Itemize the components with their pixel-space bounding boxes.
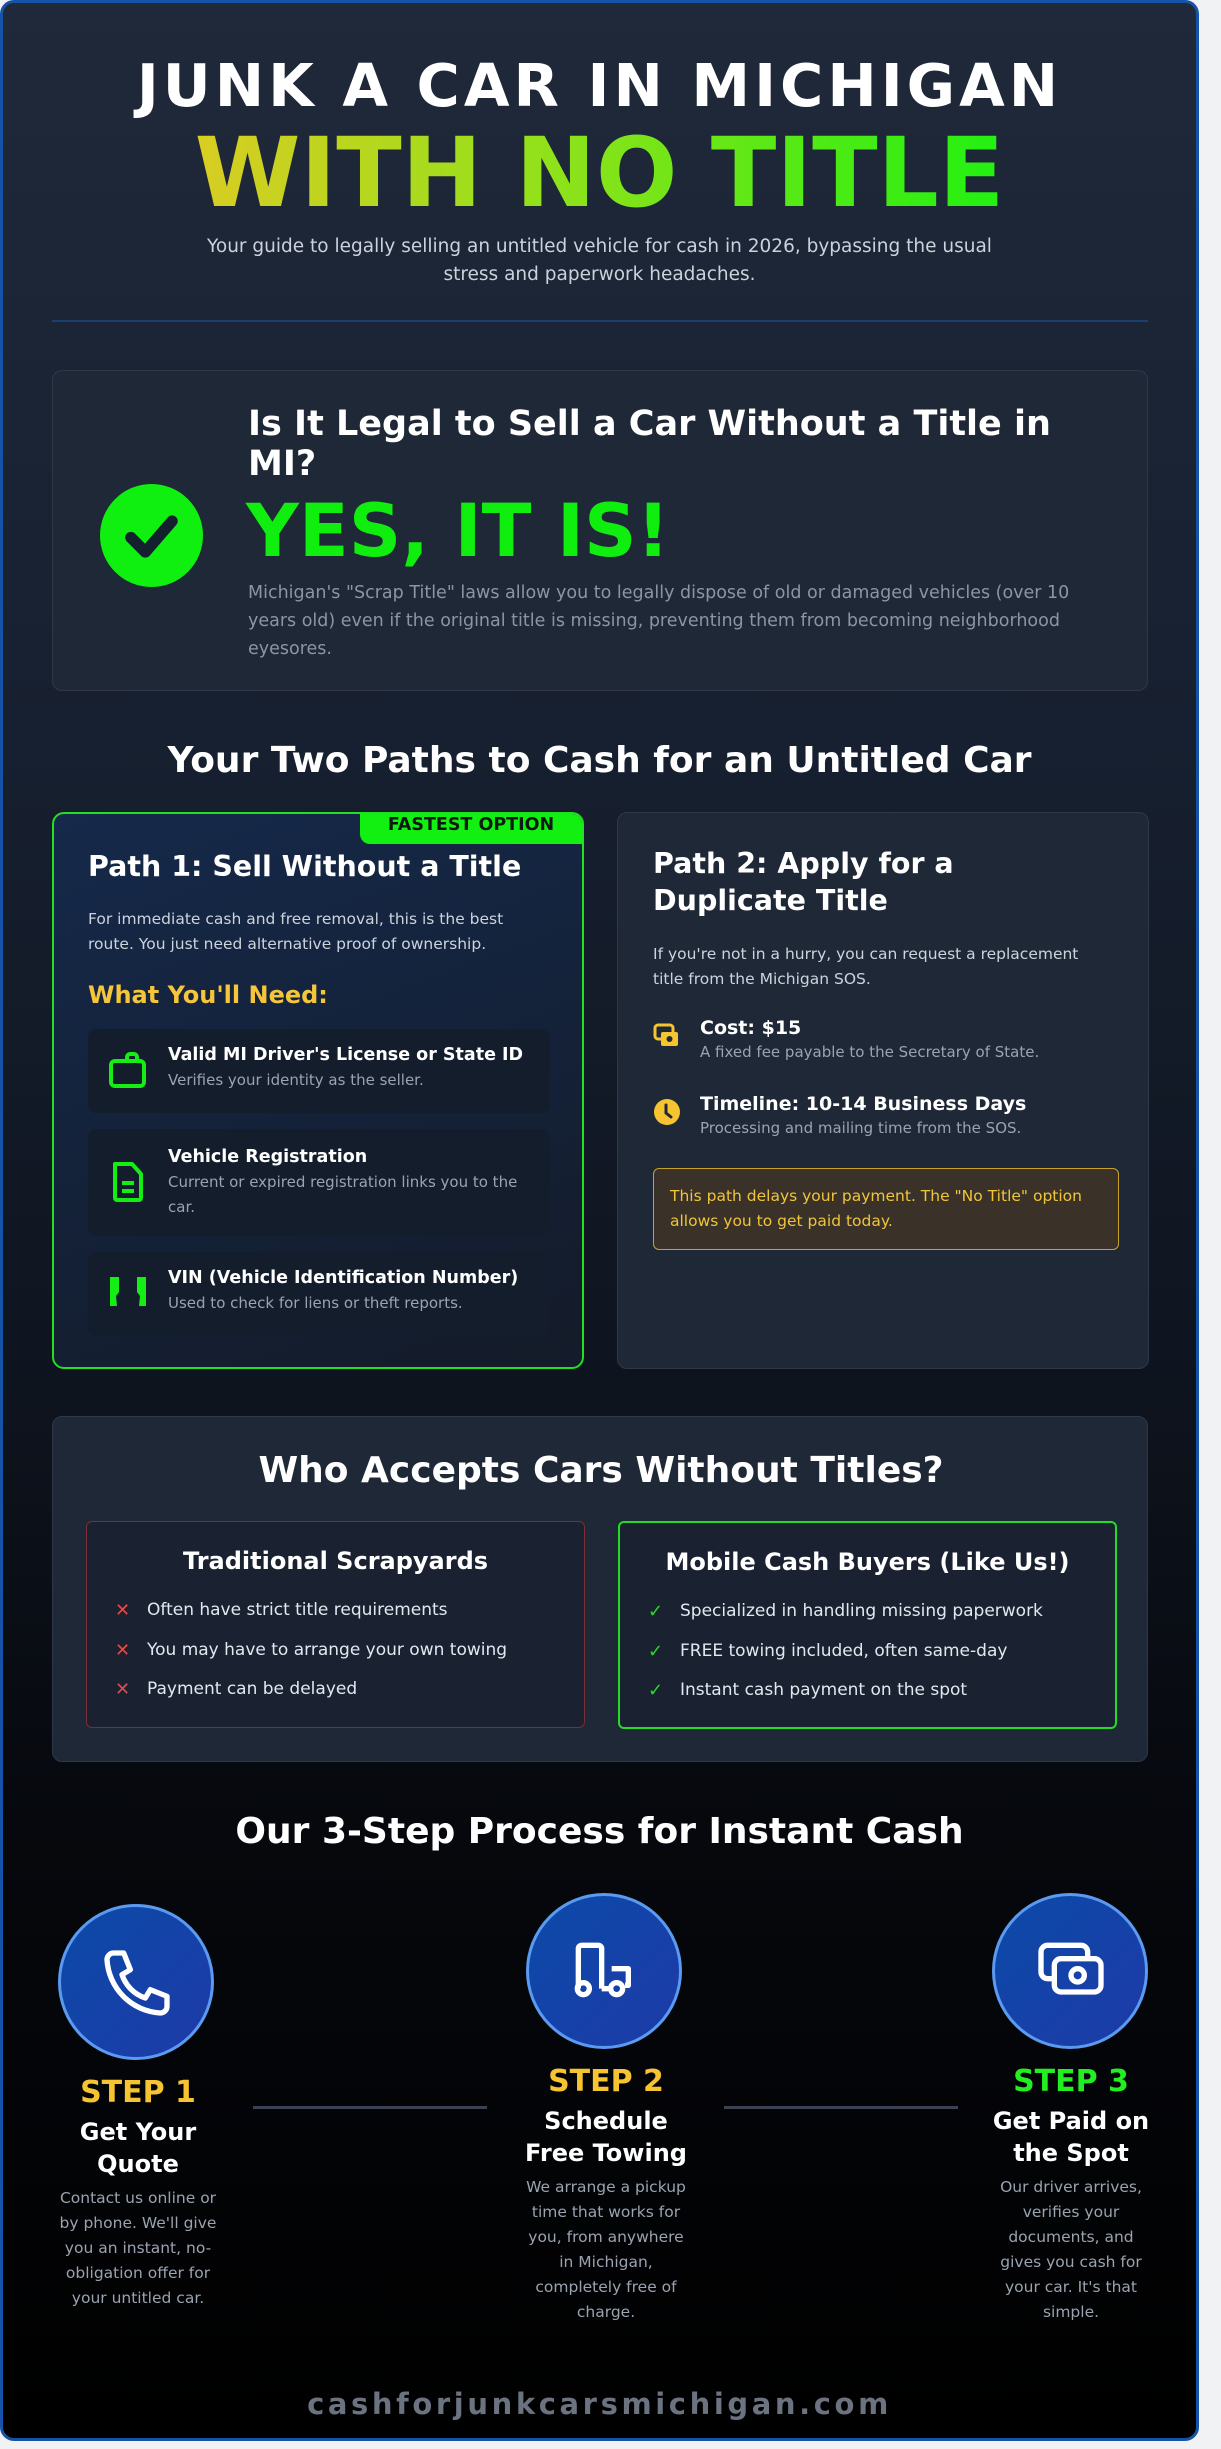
box: mobile cash buyers: Mobile Cash Buyers (Like Us!) — [665, 1548, 1070, 1576]
badge: fastest option — [360, 814, 582, 844]
path 1 description: For immediate cash and free removal, this is the best route. You just need alternative proof of ownership. — [88, 910, 503, 953]
panel: who accepts — [52, 1416, 1148, 1762]
box: traditional scrapyards: Payment can be delayed — [147, 1679, 357, 1699]
subheading: what you'll need: What You'll Need: — [88, 981, 328, 1009]
icon: cash — [992, 1893, 1148, 2049]
step 1: STEP 1 — [80, 2075, 196, 2110]
heading: 3-step process: Our 3-Step Process for Instant Cash — [235, 1811, 964, 1852]
box: traditional scrapyards: ✕ — [115, 1600, 130, 1621]
cost item — [700, 1017, 1039, 1061]
icon: cost — [654, 1024, 678, 1046]
callout: delay warning — [653, 1168, 1119, 1250]
step 3 — [993, 2064, 1149, 2321]
item: vehicle registration: Vehicle Registration — [168, 1147, 367, 1167]
step 3: Our driver arrives, verifies your documents, and gives you cash for your car. It's that simple. — [1000, 2178, 1142, 2321]
box: mobile cash buyers: ✓ — [648, 1601, 663, 1622]
step 1: Get Your Quote — [80, 2118, 196, 2178]
box: mobile cash buyers: ✓ — [648, 1641, 663, 1662]
path 2 description: If you're not in a hurry, you can request a replacement title from the Michigan SOS. — [653, 945, 1078, 988]
answer: yes it is: YES, IT IS! — [246, 489, 670, 574]
box: traditional scrapyards: Often have strict title requirements — [147, 1600, 448, 1620]
box: mobile cash buyers: Instant cash payment on the spot — [680, 1680, 967, 1700]
item: driver's license: Valid MI Driver's License or State ID — [168, 1045, 523, 1065]
path 2 title: Path 2: Apply for a Duplicate Title — [653, 847, 954, 917]
footer: website: cashforjunkcarsmichigan.com — [307, 2387, 892, 2421]
panel: legality — [52, 370, 1148, 691]
step 1: Contact us online or by phone. We'll give you an instant, no-obligation offer for your untitled car. — [60, 2189, 216, 2307]
step 2: Schedule — [544, 2107, 668, 2135]
icon: truck — [526, 1893, 682, 2049]
item: vehicle registration: Current or expired registration links you to the car. — [168, 1173, 517, 1216]
step 2: Free Towing — [525, 2139, 687, 2167]
step 3: the Spot — [1013, 2139, 1129, 2167]
item: vehicle registration — [88, 1129, 550, 1236]
box: traditional scrapyards — [86, 1521, 585, 1728]
step 3: STEP 3 — [1013, 2064, 1129, 2099]
badge: fastest option: FASTEST OPTION — [388, 815, 554, 835]
timeline item: Timeline: 10-14 Business Days — [700, 1093, 1026, 1115]
icon: clock — [654, 1099, 680, 1125]
item: VIN: Used to check for liens or theft reports. — [168, 1294, 463, 1312]
heading: who accepts: Who Accepts Cars Without Titles? — [258, 1450, 944, 1491]
item: driver's license — [88, 1029, 550, 1113]
subtitle: Your guide to legally selling an untitled vehicle for cash in 2026, bypassing the usual stress and paperwork headaches. — [207, 236, 992, 285]
panel: path 2 — [617, 812, 1149, 1369]
icon: check circle — [100, 484, 203, 587]
box: mobile cash buyers: Specialized in handling missing paperwork — [680, 1601, 1043, 1621]
item: driver's license: Verifies your identity as the seller. — [168, 1071, 424, 1089]
cost item: A fixed fee payable to the Secretary of State. — [700, 1043, 1039, 1061]
step 3: Get Paid on — [993, 2107, 1149, 2135]
cost item: Cost: $15 — [700, 1017, 801, 1039]
connector lines — [253, 2106, 487, 2109]
timeline item — [700, 1093, 1026, 1137]
title line 2: WITH NO TITLE — [195, 117, 1004, 229]
step 2: We arrange a pickup time that works for you, from anywhere in Michigan, completely free of charge. — [526, 2178, 686, 2321]
step 2: STEP 2 — [548, 2064, 664, 2099]
heading: two paths: Your Two Paths to Cash for an Untitled Car — [167, 740, 1032, 781]
item: VIN: VIN (Vehicle Identification Number) — [168, 1268, 518, 1288]
box: traditional scrapyards: Traditional Scrapyards — [183, 1547, 488, 1575]
step 2 — [525, 2064, 687, 2321]
callout: delay warning: This path delays your payment. The "No Title" option allows you to get paid today. — [670, 1187, 1082, 1230]
timeline item: Processing and mailing time from the SOS. — [700, 1119, 1021, 1137]
item: VIN — [88, 1252, 550, 1336]
box: mobile cash buyers — [618, 1521, 1117, 1729]
step 1 — [60, 2075, 216, 2307]
heading: legal question: Is It Legal to Sell a Car Without a Title in MI? — [248, 404, 1051, 484]
icon: phone — [58, 1904, 214, 2060]
box: mobile cash buyers: FREE towing included, often same-day — [680, 1641, 1007, 1661]
explanation text: Michigan's "Scrap Title" laws allow you to legally dispose of old or damaged vehicles (over 10 years old) even if the original title is missing, preventing them from becoming neighborhood eyesores. — [248, 583, 1069, 659]
path 1 title: Path 1: Sell Without a Title — [88, 850, 521, 883]
title line 1: JUNK A CAR IN MICHIGAN — [137, 51, 1062, 120]
box: traditional scrapyards: ✕ — [115, 1640, 130, 1661]
box: mobile cash buyers: ✓ — [648, 1680, 663, 1701]
panel: path 1 — [52, 812, 584, 1369]
box: traditional scrapyards: ✕ — [115, 1679, 130, 1700]
box: traditional scrapyards: You may have to arrange your own towing — [147, 1640, 507, 1660]
